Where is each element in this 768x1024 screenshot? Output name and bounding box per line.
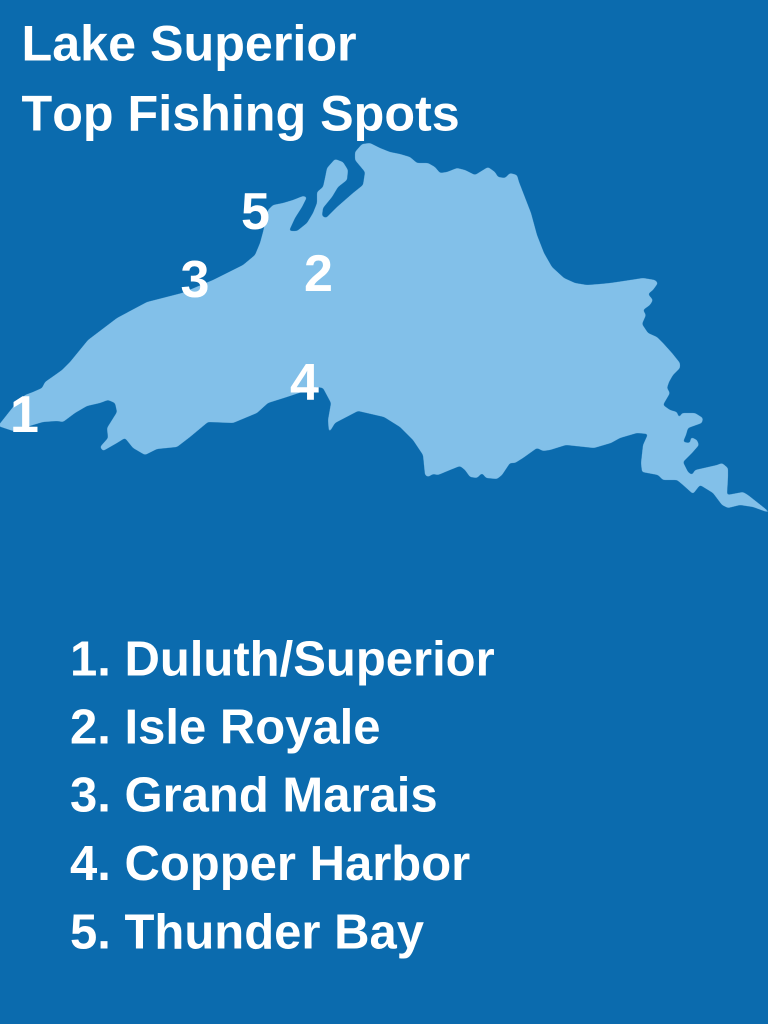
- map marker 1: 1: [10, 386, 39, 444]
- list of fishing spots: [70, 632, 495, 960]
- list of fishing spots: 2. Isle Royale: [70, 700, 381, 754]
- map marker 3: 3: [180, 251, 209, 309]
- map marker 2: 2: [304, 245, 333, 303]
- list of fishing spots: 1. Duluth/Superior: [70, 632, 495, 686]
- list of fishing spots: 4. Copper Harbor: [70, 837, 470, 891]
- map marker 4: 4: [290, 354, 319, 412]
- list of fishing spots: 5. Thunder Bay: [70, 906, 424, 960]
- map marker 5: 5: [241, 183, 270, 241]
- title: [22, 16, 460, 142]
- list of fishing spots: 3. Grand Marais: [70, 768, 438, 822]
- title: Lake Superior: [22, 16, 357, 72]
- title: Top Fishing Spots: [22, 86, 460, 142]
- map: Lake Superior shape: [0, 143, 768, 514]
